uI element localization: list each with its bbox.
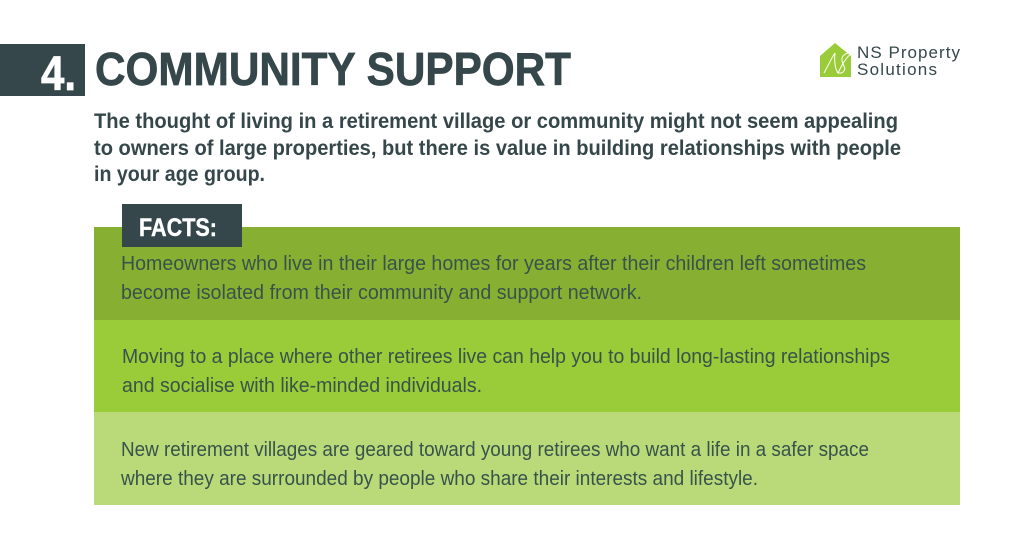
logo text: NS Property (857, 43, 960, 62)
icon: house (820, 43, 852, 77)
panel: fact 1 (94, 227, 960, 320)
logo (820, 43, 960, 79)
panel: fact 3 (94, 412, 960, 505)
intro paragraph: The thought of living in a retirement village or community might not seem appealing (94, 110, 898, 133)
panel: fact 2: Moving to a place where other retirees live can help you to build long-lasting relationships (122, 346, 890, 368)
number badge (0, 44, 85, 101)
intro paragraph: in your age group. (94, 163, 265, 186)
panel: fact 3: New retirement villages are geared toward young retirees who want a life in a safer space (121, 439, 869, 461)
title: COMMUNITY SUPPORT (95, 43, 571, 95)
facts label: FACTS: (139, 214, 217, 242)
logo text: Solutions (857, 60, 937, 79)
facts label (122, 204, 242, 247)
panel: fact 2: and socialise with like-minded individuals. (122, 375, 482, 397)
logo text (857, 43, 960, 79)
panel: fact 3: where they are surrounded by people who share their interests and lifestyle. (120, 468, 758, 490)
panel: fact 1: Homeowners who live in their large homes for years after their children left sometimes (121, 253, 866, 275)
intro paragraph: to owners of large properties, but there is value in building relationships with people (94, 137, 901, 160)
panel: fact 2 (94, 320, 960, 412)
number badge: 4. (41, 48, 76, 101)
panel: fact 1: become isolated from their community and support network. (121, 282, 642, 304)
intro paragraph (94, 110, 901, 186)
